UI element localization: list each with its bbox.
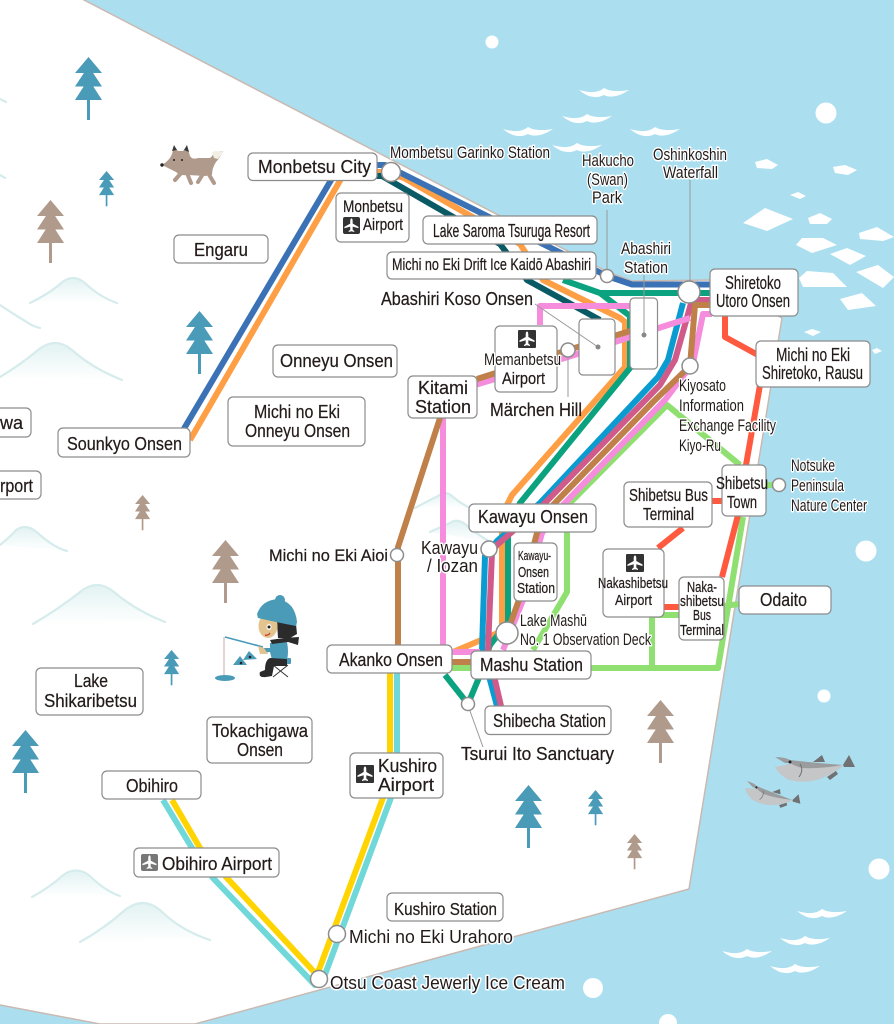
label: Shibetsu Bus Terminal: Shibetsu Bus — [629, 485, 708, 505]
label: Kawayu Onsen — [469, 504, 596, 532]
station circles — [310, 162, 786, 988]
label: Michi no Eki Aioi: Michi no Eki Aioi — [269, 546, 388, 565]
label: Michi no Eki Onneyu Onsen: Michi no Eki — [254, 402, 340, 422]
sea circles — [486, 36, 890, 1024]
label: Michi no Eki Shiretoko, Rausu: Michi no Eki — [776, 345, 850, 365]
label: Sounkyo Onsen — [58, 428, 190, 457]
label: Lake Mashu No. 1 Observation Deck: Lake Mashū — [520, 611, 587, 630]
label: Odaito: Odaito — [760, 590, 807, 610]
line: light pink — [443, 306, 712, 652]
label: Memanbetsu Airport: Airport — [502, 369, 545, 388]
label: cropped wa: wa — [0, 413, 24, 433]
label: Kushiro Airport — [350, 753, 443, 798]
label: Otsu Coast Jewerly Ice Cream: Otsu Coast Jewerly Ice Cream — [330, 973, 565, 993]
label: Oshinkoshin Waterfall: Oshinkoshin — [653, 145, 727, 164]
line: orange mashu branch — [453, 632, 500, 652]
label: Tokachigawa Onsen: Onsen — [237, 740, 283, 760]
label: Notsuke Peninsula Nature Center: Peninsula — [791, 476, 844, 495]
label: Notsuke Peninsula Nature Center — [791, 456, 867, 515]
label: Shibetsu Bus Terminal — [624, 482, 712, 527]
pointer lines — [470, 180, 690, 747]
label: Shiretoko Utoro Onsen — [710, 269, 798, 316]
label: Nakashibetsu Airport: Airport — [615, 592, 653, 609]
label: Naka-shibetsu Bus Terminal — [679, 577, 724, 640]
label: Kawayu Onsen: Kawayu Onsen — [478, 507, 588, 527]
label: Shibecha Station — [485, 706, 611, 734]
label: Abashiri Station — [621, 239, 671, 277]
label: Kitami Station: Kitami — [418, 378, 468, 398]
label: Shiretoko Utoro Onsen: Shiretoko — [725, 273, 781, 293]
label: Shibetsu Bus Terminal: Terminal — [643, 504, 694, 524]
label: Engaru: Engaru — [194, 240, 248, 260]
label: cropped airport: rport — [0, 476, 33, 496]
label: Kushiro Station — [387, 893, 503, 921]
label: Onneyu Onsen — [273, 345, 397, 377]
label: Shibetsu Town — [716, 465, 768, 516]
label: Odaito — [739, 586, 831, 614]
line: magenta — [488, 300, 715, 706]
label: Kawayu / Iozan: Kawayu — [421, 538, 478, 558]
label: Shibecha Station: Shibecha Station — [493, 711, 606, 731]
label: Memanbetsu Airport: Memanbetsu — [484, 350, 561, 369]
label: Kiyosato Information Exchange Facility: Kiyosato — [679, 376, 726, 395]
line: orange sounkyo to abashiri — [190, 172, 625, 625]
line: brown — [398, 305, 712, 662]
label: Lake Shikaribetsu: Lake — [74, 671, 108, 691]
label: Kawayu-Onsen Station: Onsen — [518, 564, 549, 581]
label: Monbetsu City — [248, 153, 377, 180]
label: Sounkyo Onsen: Sounkyo Onsen — [67, 434, 182, 454]
label: Kawayu / Iozan: / Iozan — [427, 556, 478, 576]
label: Monbetsu Airport: Monbetsu — [343, 197, 403, 216]
label: Abashiri Station: Abashiri — [621, 239, 671, 258]
label: Mombetsu Garinko Station: Mombetsu Garinko Station — [390, 143, 550, 162]
label: Nakashibetsu Airport: Nakashibetsu — [598, 575, 668, 592]
label: Marchen Hill: Märchen Hill — [490, 400, 582, 420]
line: green shiretoko to abashiri — [445, 280, 715, 704]
label: Engaru — [174, 235, 268, 263]
label: Monbetsu Airport: Airport — [363, 215, 403, 234]
label: Obihiro — [102, 771, 201, 799]
line: cyan — [163, 672, 397, 985]
label: Kiyosato Information Exchange Facility: Information — [679, 396, 744, 415]
label: Oshinkoshin Waterfall: Waterfall — [663, 163, 718, 182]
label: Michi no Eki Shiretoko, Rausu — [756, 341, 870, 387]
label: Mashu Station — [471, 651, 591, 679]
label: Shibetsu Town: Shibetsu — [716, 473, 768, 493]
label: Abashiri Koso Onsen: Abashiri Koso Onsen — [381, 289, 533, 309]
line: yellow — [172, 672, 390, 975]
label: cropped airport — [0, 471, 41, 499]
label: Lake Saroma Tsuruga Resort — [423, 216, 597, 244]
line: sky blue — [482, 303, 683, 706]
label: Notsuke Peninsula Nature Center: Notsuke — [791, 456, 835, 475]
label: Lake Shikaribetsu: Shikaribetsu — [44, 691, 137, 711]
label: Kiyosato Information Exchange Facility: Kiyo-Ru — [679, 436, 721, 455]
label: Lake Saroma Tsuruga Resort: Lake Saroma Tsuruga Resort — [433, 221, 590, 241]
label: Michi no Eki Onneyu Onsen: Onneyu Onsen — [245, 421, 350, 441]
line: dark teal monbetsu to koso — [372, 176, 600, 320]
mountains — [0, 99, 490, 942]
label: Lake Mashu No. 1 Observation Deck — [520, 611, 651, 649]
label: Obihiro Airport: Obihiro Airport — [162, 854, 272, 874]
label: Kushiro Airport: Airport — [378, 775, 434, 795]
label: Michi no Eki Drift Ice Kaido Abashiri — [387, 252, 596, 279]
route lines — [163, 165, 780, 985]
label: Akanko Onsen — [327, 645, 452, 673]
label: Lake Mashu No. 1 Observation Deck: No. 1 Observation Deck — [520, 630, 651, 649]
label: Tokachigawa Onsen — [207, 717, 312, 763]
label: Michi no Eki Onneyu Onsen — [228, 397, 365, 446]
label: Abashiri Station: Station — [624, 258, 668, 277]
line: light green lower — [452, 405, 780, 668]
icon: salmon — [742, 755, 855, 814]
label: Naka-shibetsu Bus Terminal: Bus — [693, 608, 711, 624]
waves — [503, 88, 847, 973]
icon: fox — [160, 145, 224, 183]
label: Monbetsu City: Monbetsu City — [258, 157, 371, 177]
label: Naka-shibetsu Bus Terminal: shibetsu — [680, 594, 724, 610]
label: Naka-shibetsu Bus Terminal: Terminal — [680, 623, 724, 639]
trees — [12, 57, 674, 869]
label: Shiretoko Utoro Onsen: Utoro Onsen — [716, 291, 790, 311]
label: Obihiro: Obihiro — [126, 776, 178, 796]
label: cropped wa — [0, 408, 31, 437]
line: red shiretoko to nakashibetsu — [658, 314, 760, 607]
label: Kushiro Station: Kushiro Station — [394, 899, 497, 919]
label: Hakucho (Swan) Park: Park — [592, 188, 622, 207]
label: Onneyu Onsen: Onneyu Onsen — [280, 351, 393, 371]
label: Kawayu-Onsen Station: Kawayu- — [518, 548, 551, 563]
label: Kawayu-Onsen Station — [514, 543, 557, 601]
label: Kawayu / Iozan — [421, 538, 478, 576]
label: Nakashibetsu Airport — [598, 549, 668, 617]
label: Kawayu-Onsen Station: Station — [517, 580, 555, 597]
label: Kiyosato Information Exchange Facility — [679, 376, 776, 455]
label: Memanbetsu Airport — [484, 326, 561, 392]
label: Kitami Station: Station — [415, 397, 471, 417]
line: blue sounkyo to shiretoko — [182, 165, 715, 432]
box: abashiri koso onsen — [579, 319, 615, 375]
label: Kushiro Airport: Kushiro — [378, 756, 437, 776]
label: Kiyosato Information Exchange Facility: Exchange Facility — [679, 416, 776, 435]
label: Akanko Onsen: Akanko Onsen — [339, 650, 443, 670]
label: Shibetsu Town: Town — [727, 492, 757, 512]
icon: ice fisherman — [215, 595, 299, 681]
label: Lake Shikaribetsu — [36, 668, 143, 715]
label: Kitami Station — [408, 376, 477, 418]
label: Hakucho (Swan) Park — [582, 151, 634, 207]
label: Tsurui Ito Sanctuary: Tsurui Ito Sanctuary — [461, 744, 614, 764]
box: abashiri station — [630, 298, 658, 369]
label: Michi no Eki Urahoro: Michi no Eki Urahoro — [349, 927, 513, 947]
label: Naka-shibetsu Bus Terminal: Naka- — [687, 580, 717, 596]
label: Michi no Eki Drift Ice Kaido Abashiri: Michi no Eki Drift Ice Kaidō Abashiri — [392, 255, 591, 274]
label: Tokachigawa Onsen: Tokachigawa — [212, 721, 309, 741]
drift ice — [743, 159, 894, 354]
label: Obihiro Airport — [134, 848, 279, 877]
label: Monbetsu Airport — [336, 193, 409, 242]
label: Hakucho (Swan) Park: Hakucho — [582, 151, 634, 170]
label: Mashu Station: Mashu Station — [480, 655, 583, 675]
label: Hakucho (Swan) Park: (Swan) — [587, 170, 628, 189]
label: Oshinkoshin Waterfall — [653, 145, 727, 182]
